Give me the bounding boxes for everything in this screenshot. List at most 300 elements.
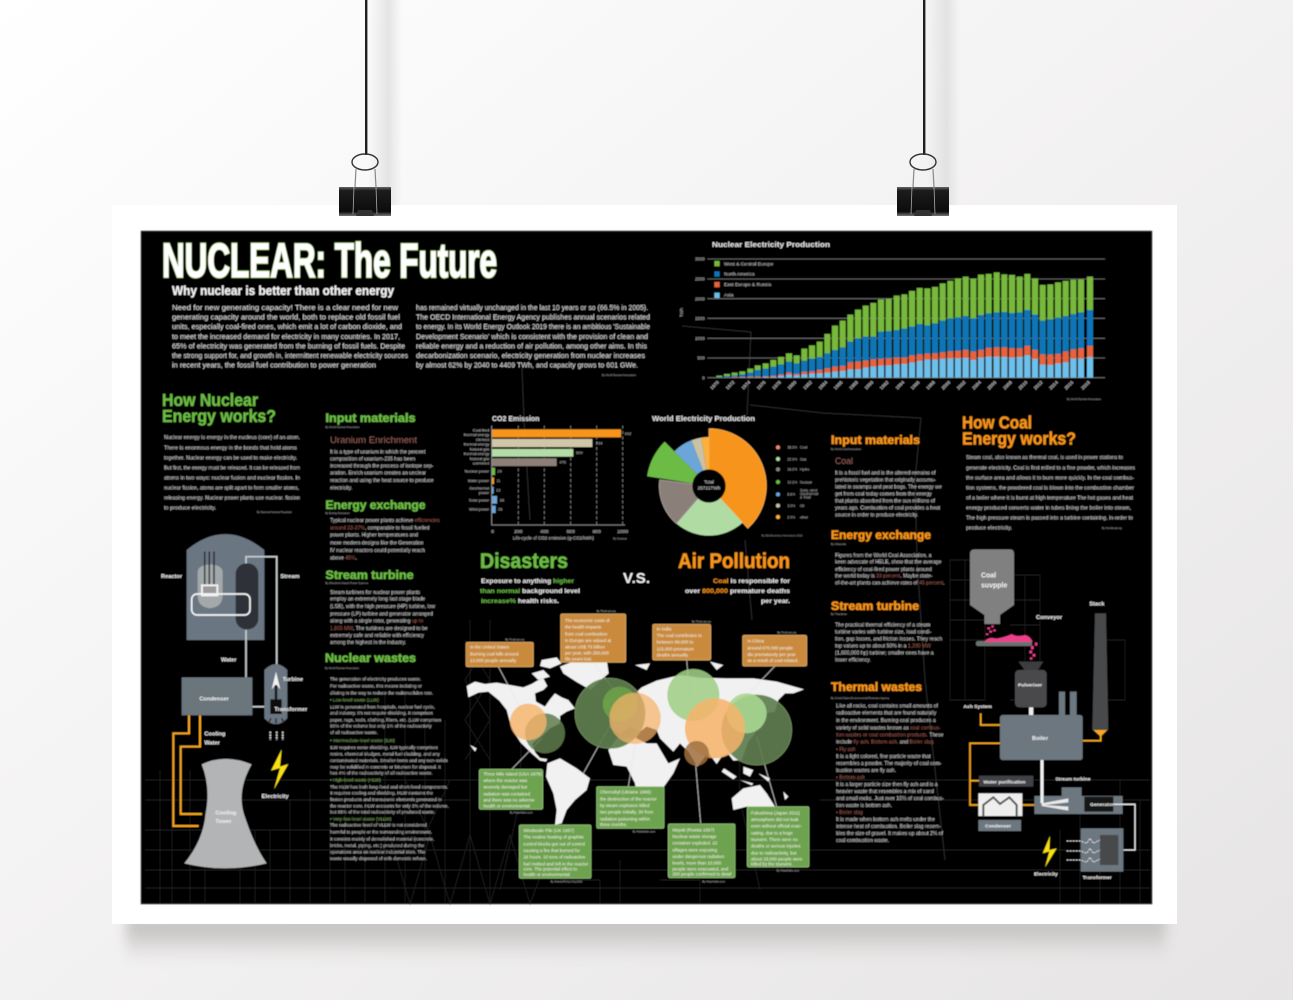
donut legend: 10.1% bbox=[787, 480, 797, 484]
condenser bbox=[182, 677, 252, 715]
section: energy exchange (nuclear): above 45%. bbox=[330, 555, 357, 561]
axis labels: 400 bbox=[540, 529, 549, 535]
intro text column 2: has remained virtually unchanged in the last 10 years or so (66.5% in 2005). bbox=[416, 303, 648, 312]
cooling water pipes bbox=[173, 715, 202, 826]
section: energy exchange (coal): the world today is 33 percent. Maybe state- bbox=[835, 574, 933, 580]
steam pipe bbox=[1037, 760, 1046, 803]
diagram labels: Pulverixer bbox=[1018, 683, 1042, 689]
section: input materials (coal): source in order to produce electricity. bbox=[835, 512, 918, 518]
callout: Europe: about US$ 70 billion bbox=[565, 645, 605, 650]
heading: how coal energy works: Energy works? bbox=[962, 428, 1076, 448]
section: input materials (coal): get from coal today comes from the energy bbox=[835, 492, 932, 498]
callout: China bbox=[743, 630, 807, 666]
year labels: 2010 bbox=[1018, 380, 1029, 391]
bar category labels: combined bbox=[473, 461, 489, 465]
bar category labels: Natural gas bbox=[470, 457, 489, 461]
air pollution statement bbox=[685, 578, 791, 605]
section: energy exchange (coal): of-the-art plants can achieve rates of 45 percent. bbox=[835, 581, 945, 587]
control rods bbox=[205, 552, 214, 587]
slice: oil bbox=[691, 438, 709, 486]
diagram labels: Coal bbox=[981, 572, 996, 579]
nuclear description text: nuclear fission, atoms are split apart to form smaller atoms, bbox=[164, 485, 299, 491]
heading: how nuclear energy works: Energy works? bbox=[162, 406, 276, 426]
diagram labels: Water bbox=[221, 658, 237, 664]
section: input materials (coal) bbox=[831, 433, 942, 518]
heading: how coal energy works: How Coal bbox=[962, 412, 1032, 432]
diagram labels: Water bbox=[204, 740, 221, 746]
section: energy exchange (nuclear): IV nuclear reactors could potentially reach bbox=[330, 548, 425, 554]
section: stream turbine (coal) bbox=[831, 599, 942, 664]
slice: nuclear bbox=[647, 442, 709, 486]
donut legend: 2.0% bbox=[787, 515, 795, 519]
diagram labels: Ash System bbox=[963, 704, 992, 710]
callout: Europe: the health impacts bbox=[565, 625, 602, 630]
bar category labels: Coal-fired bbox=[473, 429, 489, 433]
bar category labels: thermal energy bbox=[464, 433, 489, 437]
cooling tower bbox=[184, 759, 267, 868]
section: nuclear wastes: For radioactive waste, this means isolating or bbox=[330, 683, 422, 688]
coal description text: energy produced converts water in tubes lining the boiler into steam, bbox=[966, 506, 1131, 512]
section: thermal wastes: • Bottom ash bbox=[836, 775, 865, 781]
bar category labels: Water power bbox=[468, 479, 490, 483]
black infographic panel bbox=[141, 231, 1152, 904]
hanging string right bbox=[923, 0, 925, 155]
section: nuclear wastes: diluting is the way to reduce the radionuclides rate. bbox=[330, 690, 433, 695]
year labels: 1982 bbox=[802, 380, 813, 391]
impact circles bbox=[575, 678, 645, 748]
bar values: 11 bbox=[496, 478, 501, 483]
coal description text: the surface area and allows it to burn more quickly. In the coal combus- bbox=[966, 475, 1134, 481]
callout: India: 115,000 premature bbox=[657, 646, 694, 651]
section: energy exchange (coal): Figures from the World Coal Association, a bbox=[835, 553, 932, 559]
section: energy exchange (nuclear) bbox=[326, 498, 440, 561]
section: nuclear wastes: contaminated materials. Smaller items and any non-solids bbox=[330, 758, 448, 763]
diagram labels: Water purification bbox=[983, 779, 1026, 785]
year labels: 1992 bbox=[879, 380, 890, 391]
section: thermal wastes bbox=[831, 680, 944, 844]
year labels bbox=[709, 380, 1091, 391]
section: nuclear wastes: • Very-low-level waste (VLLW) bbox=[330, 816, 392, 821]
section: stream turbine (nuclear): employ an extremely long last stage blade bbox=[330, 597, 425, 603]
callout: India bbox=[653, 619, 711, 660]
smoke stack bbox=[1092, 613, 1108, 730]
callout: Windscale: causing a fire that burned for bbox=[523, 848, 581, 853]
section: nuclear wastes: • Low-level waste (LLW) bbox=[330, 697, 379, 702]
connector guide lines bbox=[522, 326, 945, 860]
year labels: 2006 bbox=[987, 380, 998, 391]
callout: Windscale: health or environmental bbox=[523, 872, 570, 877]
bar category labels: thermal energy bbox=[464, 452, 489, 456]
callout: Mayak: people were evacuated, and bbox=[672, 866, 729, 871]
year labels: 1986 bbox=[833, 380, 844, 391]
callout: Chernobyl: two people initially, 30 from bbox=[600, 810, 654, 815]
donut legend: Gas bbox=[800, 457, 807, 461]
section: nuclear wastes: may be solidified in concrete or bitumen for disposal. It bbox=[330, 764, 442, 769]
heading: how nuclear energy works: How Nuclear bbox=[162, 390, 258, 410]
horizontal bars bbox=[492, 429, 621, 437]
section: input materials (nuclear): It is a type of uranium in which the percent bbox=[330, 450, 426, 456]
bar values: 475 bbox=[559, 459, 567, 464]
year labels: 2016 bbox=[1064, 380, 1075, 391]
diagram labels: Transformer bbox=[1083, 875, 1112, 881]
air pollution statement: over 800,000 premature deaths bbox=[685, 588, 790, 595]
bar category labels: Nuclear power bbox=[465, 470, 490, 474]
nuclear description text: to produce electricity. bbox=[164, 506, 216, 512]
coal description text: By Worldcoal.org bbox=[1102, 526, 1122, 530]
section: stream turbine (nuclear): 1,805 MW. The turbines are designed to be bbox=[330, 626, 428, 632]
steam turbine and generator bbox=[1034, 796, 1123, 814]
nuclear description text: atoms in two ways: nuclear fusion and nuclear fission. In bbox=[164, 475, 300, 481]
section: stream turbine (coal): (1,600,000 hp) turbine; smaller ones have a bbox=[835, 651, 934, 657]
intro text column 1: units, especially coal-fired ones, which emit a lot of carbon dioxide, and bbox=[172, 322, 402, 331]
section: nuclear wastes: ILW requires some shielding. ILW typically comprises bbox=[330, 745, 439, 750]
series: East Europe & Russia bbox=[727, 346, 1090, 378]
section: thermal wastes: resembles a powder. The majority of coal com- bbox=[836, 761, 942, 767]
diagram labels: Electricity bbox=[262, 794, 290, 800]
section: thermal wastes: coal combustion waste. bbox=[836, 838, 889, 844]
year labels: 2012 bbox=[1033, 380, 1044, 391]
boiler bbox=[1000, 715, 1083, 760]
diagram: coal power plant bbox=[963, 549, 1135, 881]
callout: India: between 80,000 to bbox=[657, 640, 694, 645]
bar category labels: Geothermal bbox=[469, 487, 489, 491]
diagram labels bbox=[161, 574, 308, 825]
section: stream turbine (coal): Stream turbine bbox=[831, 599, 919, 613]
callout: India: The coal contributes to bbox=[657, 633, 702, 638]
section: energy exchange (coal): By Wikipedia bbox=[831, 542, 847, 546]
bar values: 734 bbox=[596, 440, 603, 445]
section: energy exchange (nuclear): Energy exchange bbox=[326, 498, 426, 512]
callout: India: By Thoth-air.org bbox=[692, 619, 711, 623]
callout: India: In India bbox=[657, 626, 672, 631]
donut legend: 38.3% bbox=[787, 446, 797, 450]
section: nuclear wastes: fission products and transuranic elements generated in bbox=[330, 797, 442, 802]
donut legend: Solar, wind bbox=[800, 488, 817, 492]
axis labels: Life-cycle of CO2 emission (g-CO2/kWh) bbox=[513, 535, 594, 540]
section: thermal wastes: intense heat of combustion. Boiler slag resem- bbox=[836, 824, 941, 830]
falling coal bbox=[986, 625, 1037, 660]
section: nuclear wastes: Nuclear wastes bbox=[325, 651, 416, 665]
section: thermal wastes: radioactive elements that are found naturally bbox=[836, 711, 937, 717]
coal description text: produce electricity. bbox=[966, 526, 1012, 532]
section: thermal wastes: It is a larger particle size then fly ash and is a bbox=[836, 782, 938, 788]
callout: United States bbox=[466, 638, 533, 667]
year labels: 2008 bbox=[1002, 380, 1013, 391]
diagram labels: suvpple bbox=[981, 583, 1008, 590]
disasters statement: increase% health risks. bbox=[481, 598, 559, 605]
callout: China: as a result of coal-related. bbox=[747, 658, 799, 663]
y axis labels: 1000 bbox=[695, 336, 705, 341]
slice: gas bbox=[676, 486, 743, 536]
donut legend: Oil bbox=[800, 504, 804, 508]
section: energy exchange (coal): efficiency of coal-fired power plants around bbox=[835, 567, 932, 573]
section: stream turbine (coal): lower efficiency. bbox=[835, 658, 871, 664]
intro text column 2 bbox=[416, 303, 650, 377]
year labels: 2004 bbox=[971, 380, 982, 391]
donut legend: other bbox=[800, 515, 809, 519]
disasters statement bbox=[480, 578, 580, 605]
section: thermal wastes: It is a light colored, fine particle waste that bbox=[836, 754, 931, 760]
callout: Mayak: villages were exposing bbox=[672, 847, 718, 852]
callout: Mayak: By Hitachilabs.com bbox=[702, 879, 726, 883]
section: thermal wastes: By United States Environmental Protection Agency bbox=[831, 696, 890, 700]
donut total: Total bbox=[704, 479, 714, 484]
diagram labels: Tower bbox=[215, 819, 232, 825]
air pollution statement: Coal is responsible for bbox=[713, 578, 791, 585]
callout: Three Mile Island: and there was no adverse bbox=[483, 798, 535, 803]
callout: Fukushima: uating, due to a huge bbox=[751, 830, 793, 835]
section: thermal wastes: It is made when bottom ash melts under the bbox=[836, 817, 935, 823]
diagram labels: Reactor bbox=[161, 574, 183, 580]
diagram labels bbox=[963, 572, 1114, 881]
section: energy exchange (coal): Energy exchange bbox=[831, 528, 931, 542]
coal description text: generate electricity. Coal is first milled to a fine powder, which increases bbox=[966, 465, 1135, 471]
title: NUCLEAR: The Future bbox=[162, 235, 497, 288]
nuclear description text: By National Nuclear Regulator bbox=[257, 510, 292, 514]
callout: Three Mile Island: severely damaged but bbox=[483, 785, 528, 790]
section: energy exchange (coal): keen advocate of HELE, show that the average bbox=[835, 560, 942, 566]
callout: Fukushima: even without official evac- bbox=[751, 824, 802, 829]
section: thermal wastes: heavier waste that resembles a mix of sand bbox=[836, 789, 934, 795]
reactor vessel bbox=[198, 564, 223, 608]
series: North America bbox=[719, 310, 1090, 378]
axis labels: 600 bbox=[567, 529, 575, 535]
section: thermal wastes: bles the size of gravel. It makes up about 2% of bbox=[836, 831, 944, 837]
donut centre bbox=[692, 469, 726, 503]
nuclear description text: Nuclear energy is energy in the nucleus (core) of an atom. bbox=[164, 435, 300, 441]
intro text column 2: by almost 62% by 2040 to 4409 TWh, and capacity grows to 601 GWe. bbox=[416, 360, 638, 370]
donut legend: 16.2% bbox=[787, 468, 797, 472]
section: input materials (coal): years ago. Combustion of coal provides a heat bbox=[835, 506, 941, 512]
callout: China: By Thoth-air.org bbox=[777, 630, 797, 634]
bar category labels: power bbox=[479, 491, 490, 495]
section: input materials (coal): Coal bbox=[835, 456, 853, 466]
callout: Windscale: fuel melted and left in the reactor bbox=[523, 861, 589, 866]
year labels: 2014 bbox=[1048, 380, 1059, 391]
pulverizer to boiler link bbox=[1029, 707, 1033, 715]
year labels: 1994 bbox=[895, 380, 906, 391]
bar values: 26 bbox=[498, 507, 503, 512]
year labels: 1990 bbox=[864, 380, 875, 391]
intro text column 1: 65% of electricity was generated from the burning of fossil fuels. Despite bbox=[172, 342, 405, 350]
title bbox=[162, 235, 497, 288]
poster drop shadow bbox=[126, 0, 1166, 966]
section: nuclear wastes: has 4% of the radioactivity of all radioactive waste. bbox=[330, 771, 433, 776]
hanging string left bbox=[365, 0, 367, 155]
donut legend: Nuclear bbox=[800, 480, 813, 484]
binder clip right bbox=[897, 154, 949, 216]
section: nuclear wastes: bricks, metal, piping, etc.) produced during the bbox=[330, 843, 425, 848]
water purification box bbox=[979, 776, 1033, 787]
axis labels: 200 bbox=[514, 529, 523, 535]
intro text column 1: the strong support for, and growth in, intermittent renewable electricity sources bbox=[172, 351, 408, 360]
callout: Europe: in Europe are valued at bbox=[565, 638, 612, 643]
donut legend: Geothermal bbox=[800, 492, 818, 496]
section: nuclear wastes: of all radioactive waste. bbox=[330, 730, 378, 735]
intro text column 2: By World Nuclear Association bbox=[602, 373, 637, 377]
section: stream turbine (nuclear): among the highest in the industry. bbox=[330, 640, 406, 646]
section: nuclear wastes: It requires cooling and shielding. HLW contains the bbox=[330, 791, 434, 796]
year labels: 1998 bbox=[925, 380, 936, 391]
y axis labels: 0 bbox=[702, 375, 705, 380]
section: thermal wastes: bustion wastes are fly ash. bbox=[836, 768, 896, 774]
diagram labels: Stream bbox=[280, 574, 300, 580]
title: NUCLEAR: The Future bbox=[162, 235, 497, 288]
callout: Fukushima: due to radioactivity, but bbox=[751, 850, 797, 855]
chart legend bbox=[714, 261, 774, 298]
year labels: 1980 bbox=[787, 380, 798, 391]
electricity bolt bbox=[271, 749, 288, 789]
section: nuclear wastes: • Intermediate-level waste (ILW) bbox=[330, 738, 395, 743]
section: thermal wastes: in the environment. Burning coal produces a bbox=[836, 718, 936, 724]
coal hopper bbox=[970, 549, 1014, 624]
coal description text: tion systems, the powdered coal is blown into the combustion chamber bbox=[966, 486, 1134, 492]
stack funnel bbox=[1093, 730, 1107, 737]
callout: Three Mile Island: By Hitachilabs.com bbox=[510, 810, 533, 814]
bar values: 13 bbox=[496, 488, 501, 493]
section: stream turbine (coal): turbine varies with turbine size, load condi- bbox=[835, 630, 932, 636]
electricity bolt bbox=[1043, 836, 1057, 867]
diagram labels: Condenser bbox=[199, 696, 230, 702]
heading: air pollution: Air Pollution bbox=[678, 550, 790, 573]
nuclear description text: There is enormous energy in the bonds that hold atoms bbox=[164, 445, 297, 451]
section: nuclear wastes bbox=[325, 651, 449, 861]
year labels: 2000 bbox=[941, 380, 952, 391]
section: stream turbine (nuclear): pressure (LP) turbine and generator arranged bbox=[330, 611, 433, 617]
axis labels: 800 bbox=[593, 529, 601, 535]
steam generator bbox=[236, 563, 258, 629]
reactor core bbox=[202, 585, 217, 595]
binder clip left bbox=[339, 154, 391, 216]
transformer bbox=[1081, 828, 1123, 872]
intro text column 2: to energy. In its World Energy Outlook 2019 there is an ambitious 'Sustainable bbox=[416, 322, 650, 331]
turbine blade bbox=[272, 672, 280, 689]
axis labels bbox=[491, 529, 628, 541]
chart legend: East Europe & Russia bbox=[724, 282, 772, 288]
y axis labels: 1500 bbox=[695, 316, 705, 321]
intro text column 1: Need for new generating capacity! There is a clear need for new bbox=[172, 303, 399, 312]
callout: Windscale: The routine heating of graphite bbox=[523, 835, 585, 840]
callout: United States: In the United States bbox=[470, 645, 510, 650]
year labels: 2018 bbox=[1080, 380, 1091, 391]
callout: Europe: By Thoth-air.org bbox=[597, 609, 616, 613]
section: nuclear wastes: operations area on nuclear industrial sites. The bbox=[330, 849, 426, 854]
diagram labels: Stream turbine bbox=[1055, 776, 1091, 782]
section: nuclear wastes: resins, chemical sludges, metal fuel cladding, and any bbox=[330, 752, 441, 757]
world map with callouts bbox=[466, 609, 809, 884]
y axis labels: 2500 bbox=[695, 277, 705, 282]
donut legend: & Tidal bbox=[800, 496, 811, 500]
callout: Fukushima: about 19,000 people were bbox=[751, 856, 803, 861]
donut legend: By IEA Electricity Information 2019 bbox=[762, 533, 803, 537]
callout: Fukushima: killed by the tsunami. bbox=[751, 861, 793, 866]
callout: Three Mile Island: health or environmental bbox=[483, 804, 530, 809]
series: West & Central Europe bbox=[719, 272, 1090, 378]
slice: solar wind bbox=[674, 440, 709, 486]
section: nuclear wastes: harmful to people or the surrounding environment. bbox=[330, 830, 432, 835]
callout: Mayak: under dangerous radiation bbox=[672, 854, 725, 859]
section: input materials (nuclear): composition of uranium-235 has been bbox=[330, 457, 415, 463]
section: thermal wastes: • Boiler slag bbox=[836, 810, 863, 816]
chart: nuclear electricity production bbox=[679, 240, 1105, 401]
section: input materials (coal): Input materials bbox=[831, 433, 920, 447]
connector lines bbox=[498, 660, 777, 823]
y axis labels: 3000 bbox=[695, 257, 705, 262]
chart legend: West & Central Europe bbox=[724, 261, 774, 267]
section: nuclear wastes: The generation of electricity produces waste. bbox=[330, 676, 421, 681]
versus label: V.S. bbox=[623, 570, 650, 587]
intro text column 1: generating capacity around the world, both to replace old fossil fuel bbox=[172, 312, 400, 322]
donut total: 25721TWh bbox=[698, 486, 721, 491]
donut legend: Coal bbox=[800, 446, 807, 450]
bar category labels: Wind power bbox=[469, 508, 490, 512]
callout: Mayak: container exploded. 22 bbox=[672, 841, 718, 846]
section: nuclear wastes: By World Nuclear Association bbox=[325, 666, 360, 670]
callout: Chernobyl: the destruction of the reactor bbox=[600, 796, 657, 801]
map landmasses bbox=[467, 657, 804, 825]
section: stream turbine (nuclear) bbox=[326, 568, 435, 646]
section: input materials (coal): that plants absorbed from the sun millions of bbox=[835, 499, 936, 505]
diagram: nuclear power plant bbox=[161, 534, 308, 868]
section: stream turbine (nuclear): Stream turbine bbox=[326, 568, 414, 582]
section: stream turbine (nuclear): By Mitsubishi Hitachi Power Systems bbox=[326, 581, 369, 585]
intro text column 2: reliable energy and a reduction of air pollution, among other aims. In this bbox=[416, 342, 647, 350]
section: nuclear wastes: LLW is generated from hospitals, nuclear fuel cycle, bbox=[330, 704, 435, 709]
section: input materials (nuclear): electricity. bbox=[330, 486, 352, 492]
diagram labels: Generator bbox=[1090, 802, 1114, 808]
chart: nuclear electricity production: Nuclear Electricity Production bbox=[712, 240, 830, 249]
bar category labels: Natural gas bbox=[470, 448, 489, 452]
section: input materials (coal): By World Coal Association bbox=[831, 447, 862, 451]
intro text column 1: in recent years, the fossil fuel contribution to power generation bbox=[172, 360, 376, 370]
section: thermal wastes: tion waste is bottom ash. bbox=[836, 803, 892, 809]
donut legend: Hydro bbox=[800, 468, 809, 472]
pulverizer bbox=[1018, 662, 1043, 671]
callout: Mayak: Mayak (Russia 1957) bbox=[672, 827, 715, 832]
coal description text: Steam coal, also known as thermal coal, is used in power stations to bbox=[966, 455, 1123, 461]
bar values: 992 bbox=[625, 431, 632, 436]
section: nuclear wastes: and industry. It's not require shielding. It comprises bbox=[330, 711, 434, 716]
callout: Mayak: Nuclear waste storage bbox=[672, 834, 717, 839]
section: thermal wastes: include fly ash, Bottom ash, and Boiler slag. bbox=[836, 740, 935, 746]
y axis labels bbox=[679, 257, 705, 380]
diagram labels: Turbine bbox=[283, 677, 303, 683]
intro text column 2: Development Scenario' which is consistent with the provision of clean and bbox=[416, 332, 648, 341]
section: stream turbine (coal): top values up to about 50% in a 1,200 MW bbox=[835, 644, 931, 650]
diagram labels: Condenser bbox=[985, 823, 1011, 829]
orange pipes bbox=[970, 713, 1101, 805]
donut total bbox=[698, 479, 721, 491]
section: input materials (nuclear): increased through the process of isotope sep- bbox=[330, 464, 434, 470]
callout: Windscale: Windscale Pile (UK 1957) bbox=[523, 828, 575, 833]
section: stream turbine (nuclear): Steam turbines for nuclear power plants bbox=[330, 590, 420, 596]
section: input materials (nuclear): Uranium Enrichment bbox=[330, 435, 418, 445]
callout: Chernobyl: three months. bbox=[600, 822, 627, 827]
section: input materials (nuclear) bbox=[326, 411, 434, 492]
section: input materials (nuclear): By World Nuclear Association bbox=[326, 425, 360, 429]
section: energy exchange (nuclear): around 33-37%, comparable to fossil fuelled bbox=[330, 525, 430, 531]
air pollution statement: per year. bbox=[761, 598, 790, 605]
condenser unit bbox=[978, 793, 1022, 816]
heading: disasters: Disasters bbox=[480, 550, 568, 573]
section: stream turbine (coal): By Thandzrex bbox=[831, 612, 848, 616]
conveyor belt bbox=[976, 641, 1032, 646]
callout: Fukushima: Fukushima (Japan 2011) bbox=[751, 810, 800, 815]
slice: coal bbox=[709, 429, 766, 528]
year labels: 2002 bbox=[956, 380, 967, 391]
section: stream turbine (nuclear): along with a single rotor, generating up to bbox=[330, 619, 423, 625]
primary loop bbox=[192, 594, 250, 615]
